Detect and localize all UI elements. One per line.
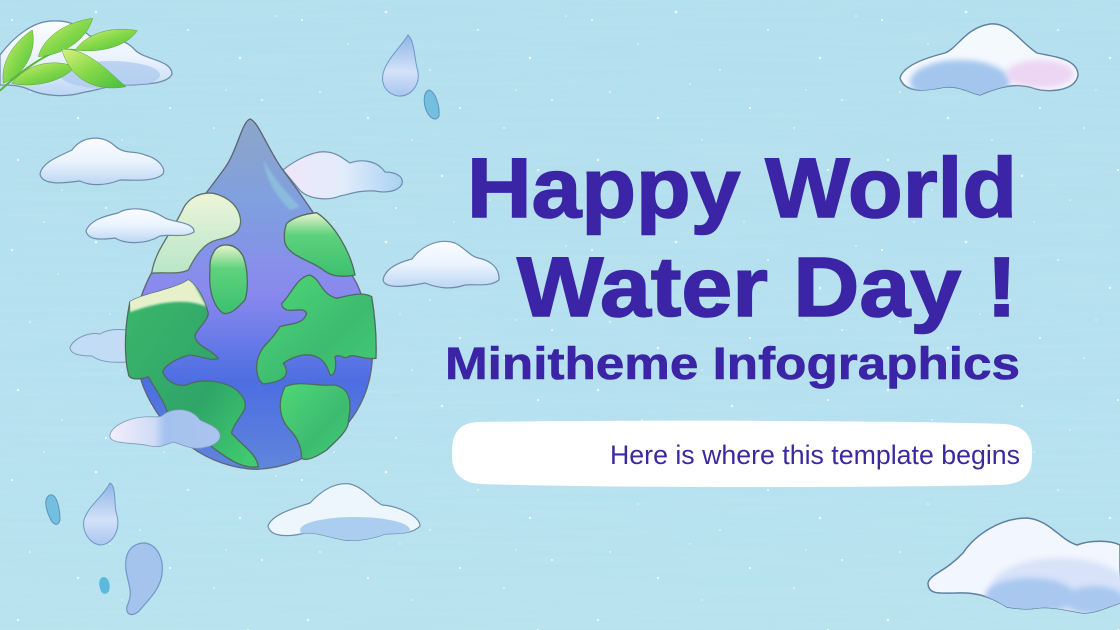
drop highlight bbox=[263, 160, 300, 210]
cloud: lower front of drop bbox=[110, 410, 220, 448]
cloud: upper left bbox=[40, 138, 164, 185]
cloud: mid left, behind drop bbox=[70, 329, 126, 362]
leaf sprig bbox=[0, 18, 137, 91]
water drop: bottom left small bbox=[46, 495, 60, 524]
title: line two: Water Day ! bbox=[517, 240, 1017, 334]
white pill with tagline bbox=[452, 421, 1032, 487]
continent: small island bbox=[210, 245, 247, 314]
water drop: bottom mini bbox=[99, 577, 110, 594]
west continent snow cap bbox=[130, 280, 206, 314]
stem bbox=[0, 49, 75, 91]
water drop: top bbox=[383, 35, 418, 96]
leaf 2 bbox=[38, 18, 93, 57]
cloud: top right bbox=[900, 24, 1078, 104]
leaf 3 bbox=[12, 63, 75, 85]
earth water drop bbox=[125, 119, 376, 469]
drop body bbox=[135, 119, 373, 469]
leaf 5 bbox=[75, 29, 137, 51]
cloud: top left bbox=[0, 21, 172, 96]
water drop: top small bbox=[424, 90, 439, 119]
continent: pale north west bbox=[152, 193, 241, 273]
cloud: bottom right bbox=[928, 518, 1120, 622]
continent: west large bbox=[125, 280, 258, 467]
continent: north east bbox=[284, 213, 355, 276]
water drop: bottom left medium bbox=[84, 483, 118, 545]
cloud: overlapping drop left bbox=[86, 209, 194, 243]
leaf 1 bbox=[3, 30, 33, 83]
continent: east large bbox=[257, 275, 376, 384]
pill shape bbox=[452, 421, 1032, 487]
cloud: right of drop bbox=[383, 241, 499, 288]
cloud: bottom center bbox=[268, 484, 420, 543]
subtitle: Minitheme Infographics bbox=[445, 338, 1020, 389]
leaf 4 bbox=[62, 49, 126, 88]
continent: south east bbox=[280, 384, 350, 459]
water drop: bottom large bbox=[126, 543, 162, 615]
title: line one: Happy World bbox=[467, 141, 1017, 235]
tagline text: Here is where this template begins bbox=[610, 440, 1020, 470]
cloud: behind drop right bbox=[283, 152, 402, 199]
